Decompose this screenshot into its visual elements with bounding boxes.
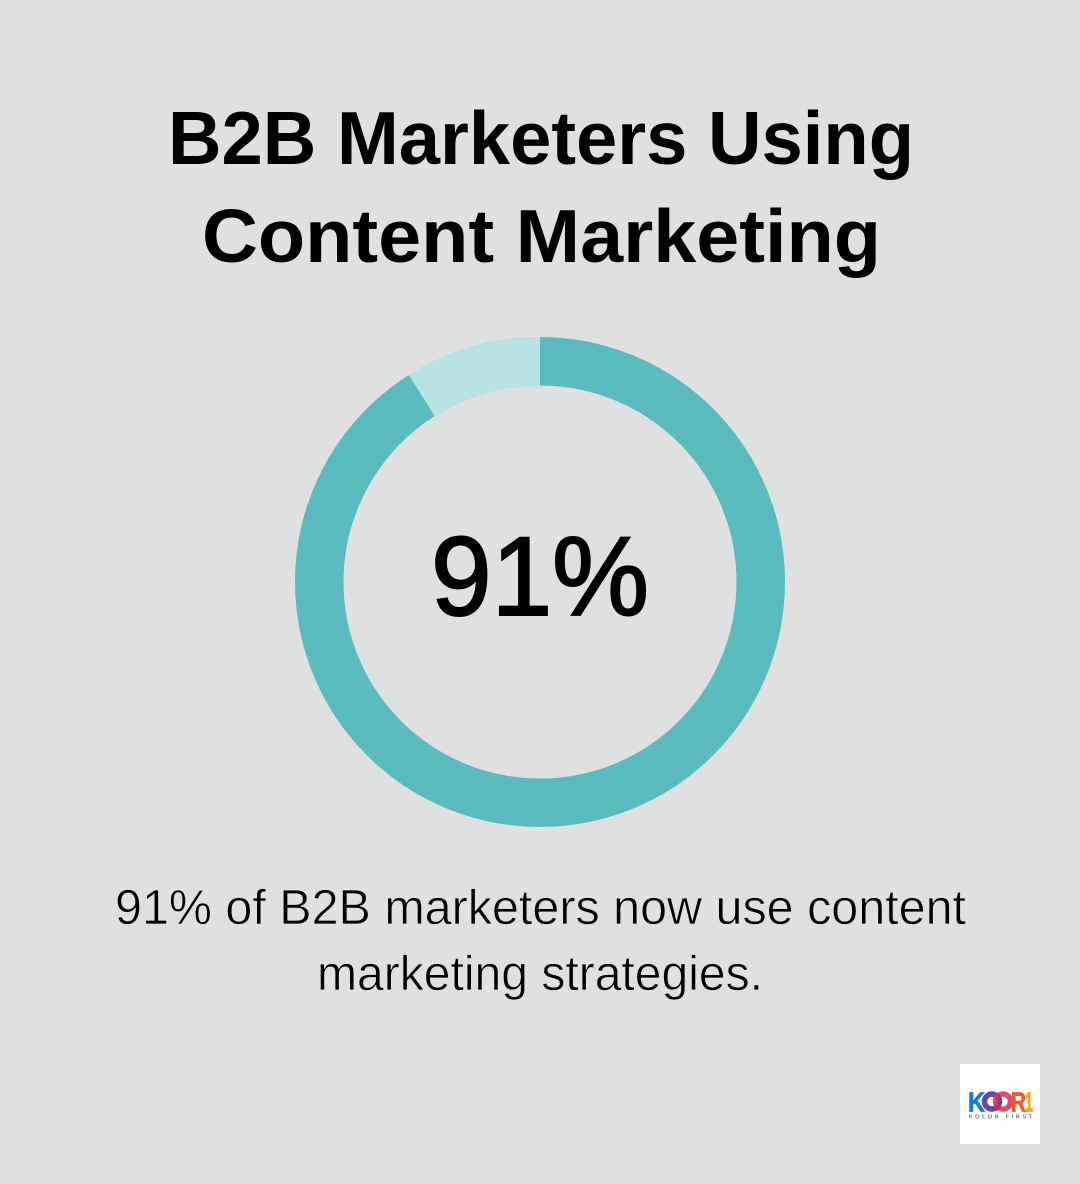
description text: 91% of B2B marketers now use content (115, 881, 966, 935)
title: B2B Marketers Using (168, 96, 914, 180)
logo tagline: KOLOR FIRST (969, 1114, 1033, 1120)
logo wordmark: R (1011, 1086, 1026, 1118)
logo: KOORI Kolor First (960, 1064, 1040, 1144)
title (168, 96, 914, 278)
logo wordmark (968, 1086, 1033, 1118)
donut chart: 91 percent (319, 361, 761, 803)
title: Content Marketing (202, 194, 881, 278)
center value: 91%: 91% (431, 514, 649, 639)
description text (115, 881, 966, 1001)
logo wordmark: K (968, 1086, 985, 1118)
description text: marketing strategies. (317, 947, 763, 1001)
ring track: full segment (319, 361, 761, 803)
ring segment: remaining 9 percent (422, 361, 540, 396)
logo wordmark: 1 (1025, 1086, 1033, 1118)
